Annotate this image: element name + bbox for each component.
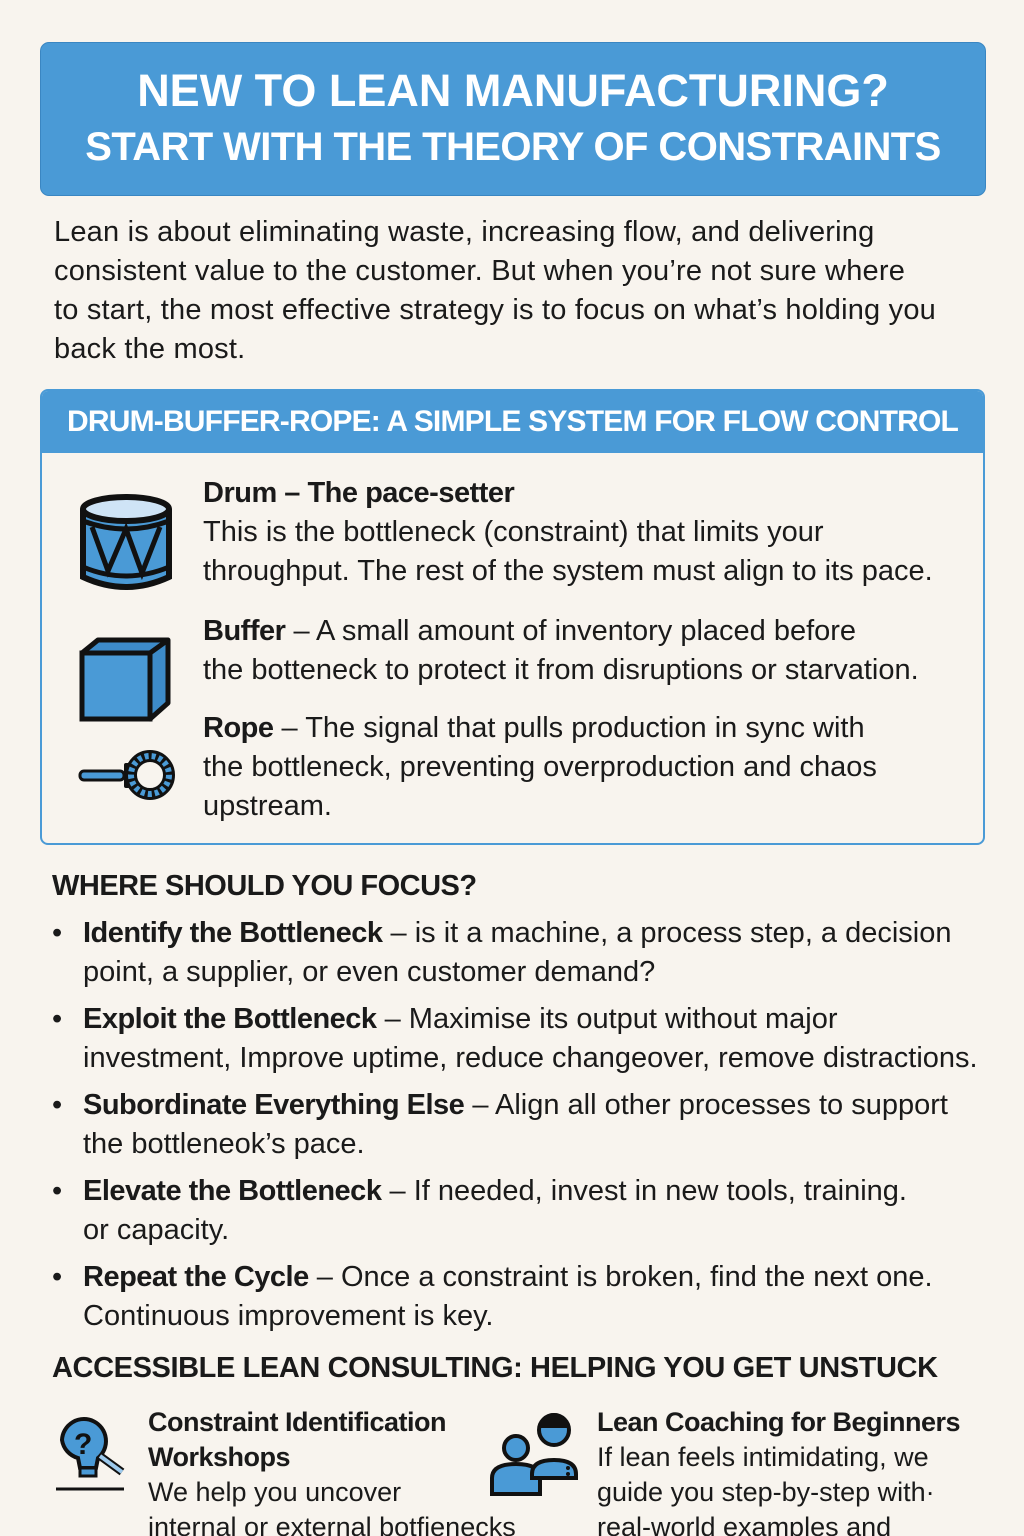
buffer text: Buffer – A small amount of inventory placed before xyxy=(203,615,856,647)
rope text xyxy=(203,712,877,822)
service: constraint workshops: Constraint Identification xyxy=(148,1407,446,1437)
title banner xyxy=(40,42,986,196)
focus bullet list: • xyxy=(52,1261,62,1293)
focus bullet list: investment, Improve uptime, reduce changeover, remove distractions. xyxy=(83,1042,978,1074)
focus bullet list: • xyxy=(52,1089,62,1121)
rope text: the bottleneck, preventing overproduction and chaos xyxy=(203,751,877,783)
buffer text: the botteneck to protect it from disruptions or starvation. xyxy=(203,654,919,686)
focus bullet list: • xyxy=(52,1175,62,1207)
focus bullet list: Repeat the Cycle – Once a constraint is broken, find the next one. xyxy=(83,1261,933,1293)
intro text: consistent value to the customer. But when you’re not sure where xyxy=(54,255,905,287)
focus bullet list: or capacity. xyxy=(83,1214,229,1246)
focus bullet list xyxy=(52,917,978,1332)
intro text: to start, the most effective strategy is to focus on what’s holding you xyxy=(54,294,936,326)
panel header xyxy=(42,391,983,453)
service: constraint workshops xyxy=(148,1407,516,1536)
focus bullet list: Identify the Bottleneck – is it a machine, a process step, a decision xyxy=(83,917,952,949)
buffer text xyxy=(203,615,919,686)
drum text: This is the bottleneck (constraint) that limits your xyxy=(203,516,824,548)
title banner: NEW TO LEAN MANUFACTURING? xyxy=(137,65,889,116)
service: lean coaching: If lean feels intimidating, we xyxy=(597,1442,929,1472)
service: constraint workshops: We help you uncover xyxy=(148,1477,401,1507)
heading: where should you focus: WHERE SHOULD YOU FOCUS? xyxy=(52,870,477,902)
service: constraint workshops: Workshops xyxy=(148,1442,290,1472)
focus bullet list: Subordinate Everything Else – Align all other processes to support xyxy=(83,1089,948,1121)
focus bullet list: the bottleneok’s pace. xyxy=(83,1128,365,1160)
service: lean coaching: Lean Coaching for Beginners xyxy=(597,1407,960,1437)
title banner: START WITH THE THEORY OF CONSTRAINTS xyxy=(85,125,941,169)
icon: lightbulb question xyxy=(56,1417,124,1490)
rope text: upstream. xyxy=(203,790,332,822)
intro text xyxy=(54,216,936,365)
intro text: Lean is about eliminating waste, increasing flow, and delivering xyxy=(54,216,874,248)
focus bullet list: Exploit the Bottleneck – Maximise its output without major xyxy=(83,1003,838,1035)
drum text xyxy=(203,477,933,587)
focus bullet list: Continuous improvement is key. xyxy=(83,1300,493,1332)
panel header: DRUM-BUFFER-ROPE: A SIMPLE SYSTEM FOR FLOW CONTROL xyxy=(67,405,958,438)
drum text: Drum – The pace-setter xyxy=(203,477,514,509)
rope text: Rope – The signal that pulls production in sync with xyxy=(203,712,865,744)
focus bullet list: • xyxy=(52,1003,62,1035)
focus bullet list: point, a supplier, or even customer demand? xyxy=(83,956,655,988)
drum text: throughput. The rest of the system must align to its pace. xyxy=(203,555,933,587)
icon: rope xyxy=(78,750,175,800)
icon: drum xyxy=(80,494,172,590)
icon: coaching people xyxy=(490,1413,578,1496)
service: lean coaching xyxy=(597,1407,960,1536)
service: lean coaching: guide you step-by-step with· xyxy=(597,1477,935,1507)
panel: drum-buffer-rope xyxy=(40,389,985,845)
heading: accessible lean consulting: ACCESSIBLE LEAN CONSULTING: HELPING YOU GET UNSTUCK xyxy=(52,1352,938,1384)
icon: lightbulb question: ? xyxy=(74,1428,92,1461)
icon: box xyxy=(80,638,170,722)
focus bullet list: Elevate the Bottleneck – If needed, invest in new tools, training. xyxy=(83,1175,907,1207)
focus bullet list: • xyxy=(52,917,62,949)
intro text: back the most. xyxy=(54,333,245,365)
